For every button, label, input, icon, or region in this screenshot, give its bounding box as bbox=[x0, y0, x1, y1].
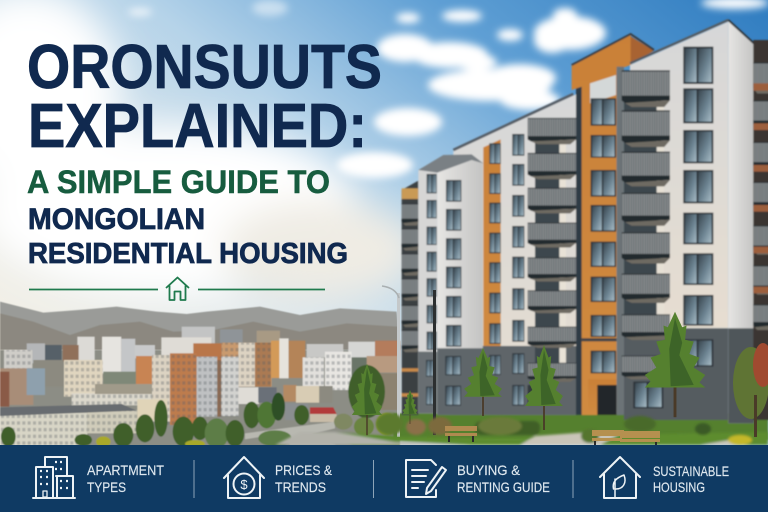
street lamp bbox=[382, 286, 436, 437]
label: sustainable housing bbox=[653, 463, 729, 495]
mid balconies bbox=[528, 118, 576, 382]
icon: house with dollar: $ bbox=[240, 477, 248, 492]
subtitle line 2: MONGOLIAN bbox=[28, 203, 205, 236]
divider 3 bbox=[572, 460, 574, 498]
right wing face bbox=[617, 20, 728, 420]
right side return bbox=[728, 20, 754, 423]
divider 1 bbox=[193, 460, 195, 498]
label: prices and trends: TRENDS bbox=[275, 479, 326, 495]
next-door balconies bbox=[753, 40, 768, 420]
benches bbox=[445, 426, 660, 445]
far towers bbox=[27, 327, 400, 373]
icon: house with leaf bbox=[600, 457, 640, 498]
front towers bbox=[0, 353, 337, 446]
dark column bbox=[576, 87, 588, 415]
label: prices and trends bbox=[275, 462, 333, 495]
city greenery bbox=[1, 365, 397, 448]
label: sustainable housing: SUSTAINABLE bbox=[653, 463, 729, 479]
orange tower bbox=[572, 34, 654, 415]
mid section wall bbox=[453, 94, 577, 415]
title block bbox=[27, 33, 382, 270]
mid towers bbox=[0, 338, 398, 410]
left block side face bbox=[418, 167, 437, 413]
label: prices and trends: PRICES & bbox=[275, 462, 333, 478]
city skyline bbox=[0, 327, 400, 448]
right wing balconies bbox=[622, 70, 670, 379]
subtitle green: A SIMPLE GUIDE TO bbox=[27, 164, 330, 200]
title line 2: EXPLAINED: bbox=[28, 92, 367, 161]
divider 2 bbox=[372, 460, 374, 498]
title line 1: ORONSUUTS bbox=[27, 33, 382, 102]
label: buying and renting guide: RENTING GUIDE bbox=[457, 479, 550, 495]
label: apartment types: APARTMENT bbox=[87, 462, 164, 478]
trees bbox=[352, 312, 768, 437]
clouds bbox=[0, 0, 768, 300]
footer bar bbox=[0, 445, 768, 512]
base ground behind building bbox=[393, 413, 768, 440]
label: apartment types: TYPES bbox=[87, 479, 126, 495]
divider with house icon bbox=[29, 278, 325, 300]
subtitle line 3: RESIDENTIAL HOUSING bbox=[28, 238, 348, 270]
label: buying and renting guide bbox=[457, 462, 550, 495]
icon: house with dollar bbox=[224, 457, 264, 498]
city road bbox=[245, 422, 337, 445]
label: buying and renting guide: BUYING & bbox=[457, 462, 521, 478]
far left wing bbox=[402, 181, 419, 415]
mountains bbox=[0, 302, 400, 350]
left block front face bbox=[418, 154, 483, 415]
grounds: path, lawn, shrubs bbox=[275, 413, 768, 445]
label: sustainable housing: HOUSING bbox=[653, 479, 705, 495]
main apartment building bbox=[393, 20, 768, 440]
icon: document and pencil bbox=[406, 460, 446, 497]
label: apartment types bbox=[87, 462, 164, 495]
icon: apartment buildings bbox=[33, 457, 75, 498]
